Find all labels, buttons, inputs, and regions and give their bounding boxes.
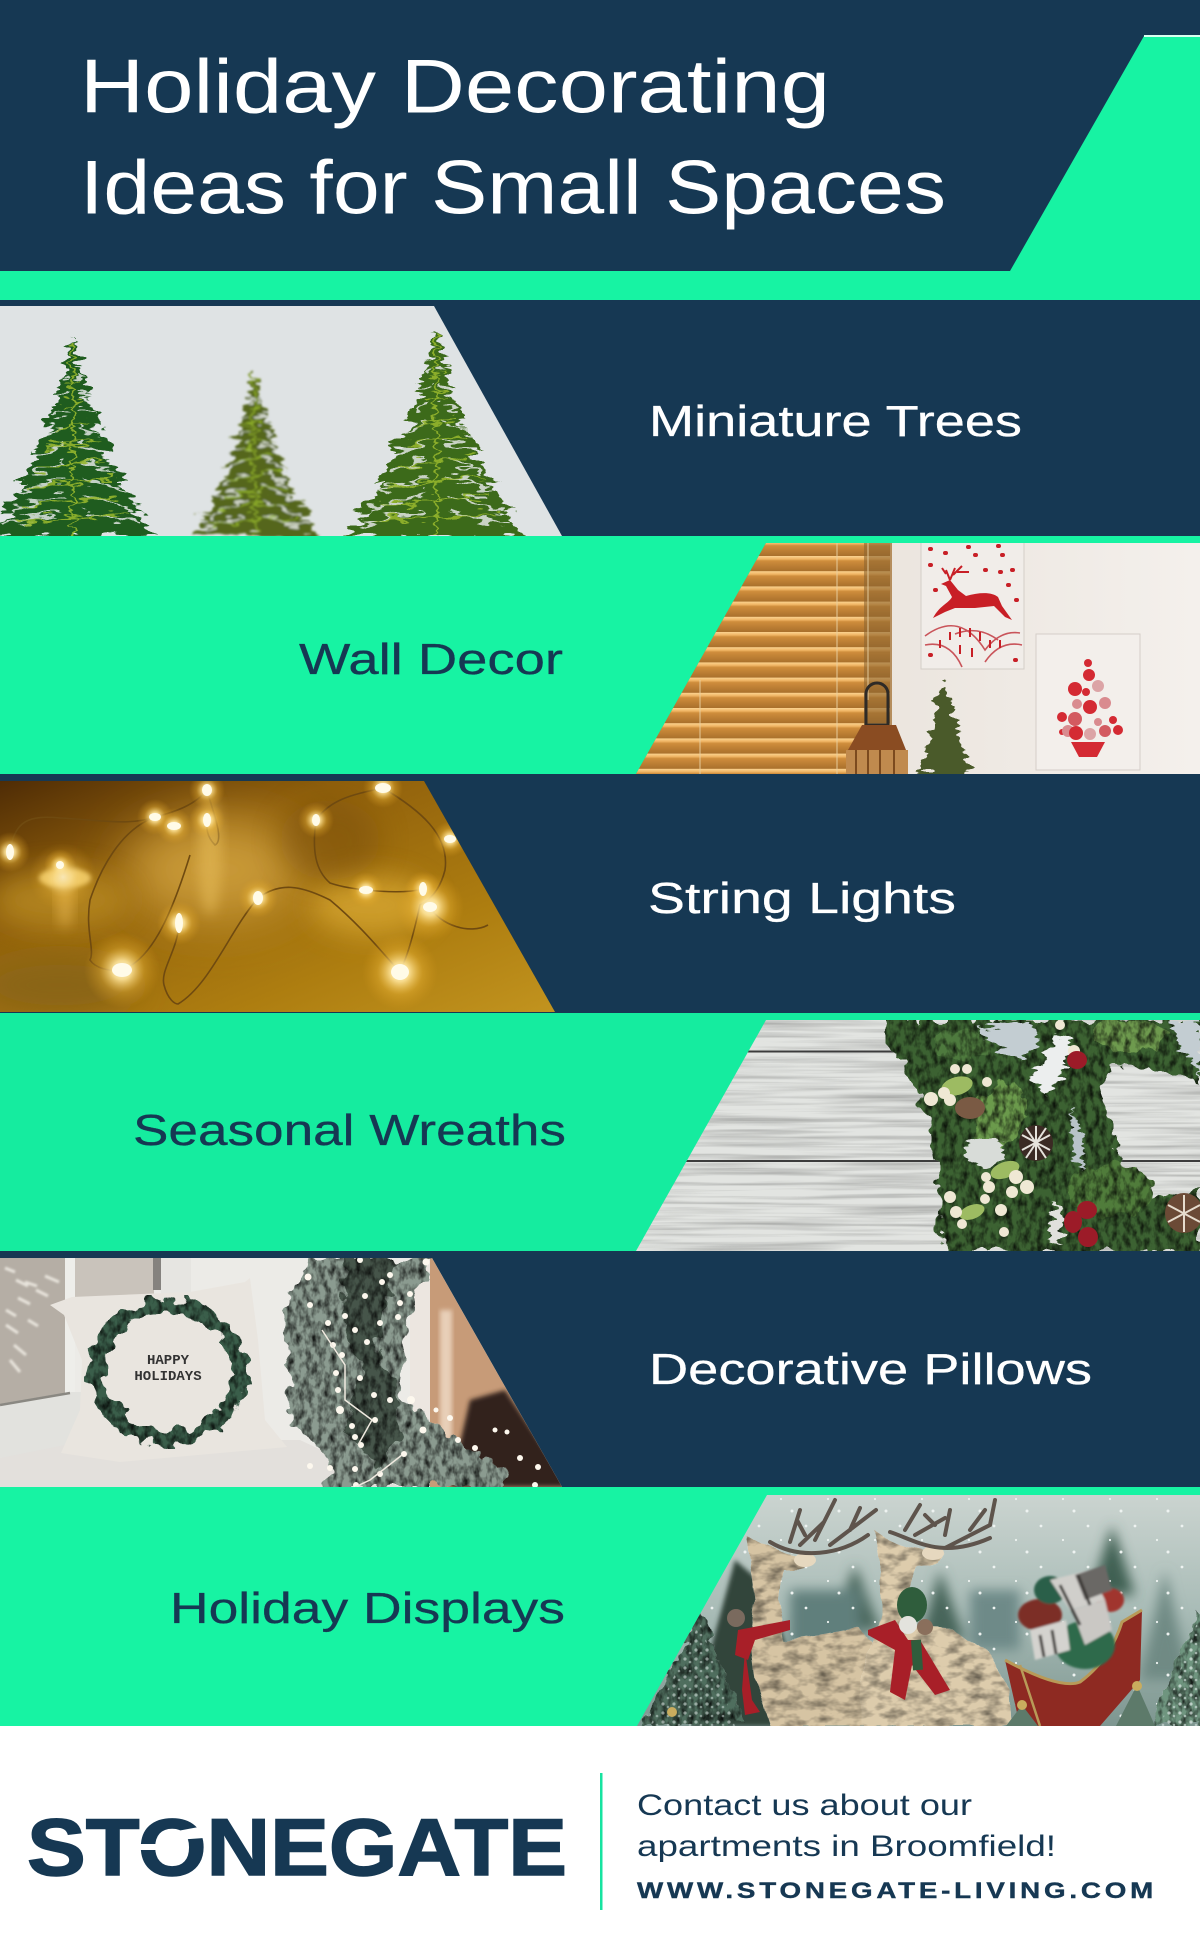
label: wall decor: Wall Decor [299, 635, 563, 684]
deer right [860, 1530, 1012, 1726]
pillow text: HAPPY [147, 1353, 190, 1369]
contact text: Contact us about our [637, 1789, 972, 1822]
photo: decorative pillows [0, 1257, 575, 1488]
divider [600, 1773, 602, 1910]
photo: string lights [0, 768, 560, 1015]
label: miniature trees: Miniature Trees [649, 397, 1022, 446]
small bottle trees [667, 1681, 1155, 1726]
gifts [1018, 1565, 1124, 1669]
sprigs [727, 1587, 933, 1670]
red berries [1064, 1051, 1098, 1247]
website URL: WWW.STONEGATE-LIVING.COM [637, 1878, 1157, 1903]
pillow wreath [96, 1306, 240, 1438]
title: Ideas for Small Spaces [80, 146, 946, 230]
photo: miniature trees [0, 306, 570, 538]
left dark tree [690, 1560, 790, 1726]
fairy lights [304, 1257, 541, 1488]
panel: string lights [0, 768, 1200, 1015]
wreath foliage [886, 1020, 1200, 1251]
label: string lights: String Lights [648, 874, 956, 923]
label: decorative pillows: Decorative Pillows [649, 1345, 1092, 1394]
panel: wall decor [0, 536, 1200, 776]
photo: wall decor [630, 540, 1200, 776]
pillow [50, 1294, 154, 1342]
snow [965, 1022, 1200, 1245]
photo: holiday displays [630, 1495, 1200, 1727]
green angled accent [0, 36, 1200, 300]
lantern [846, 683, 908, 776]
window [0, 1258, 161, 1458]
sleigh [972, 1610, 1142, 1726]
front right frosted tree [1150, 1610, 1200, 1726]
card: ornament tree [1036, 634, 1140, 770]
antlers [770, 1500, 995, 1553]
ribbons [735, 1620, 950, 1715]
small fir tree [918, 683, 970, 774]
falling snow [630, 1495, 1200, 1727]
panel: decorative pillows [0, 1251, 1200, 1488]
sill [0, 1440, 400, 1487]
front left frosted tree [640, 1612, 745, 1726]
deer left [746, 1535, 880, 1726]
panel: seasonal wreaths [0, 1013, 1200, 1252]
panel: miniature trees [0, 300, 1200, 538]
panel: header [0, 0, 1200, 300]
title: Holiday Decorating [80, 44, 830, 130]
contact text: apartments in Broomfield! [637, 1830, 1056, 1863]
logo: Stonegate: STONEGATE [27, 1803, 567, 1893]
panel: footer [0, 1726, 1200, 1950]
blurred forest [790, 1525, 1190, 1680]
deer ears [794, 1546, 944, 1567]
panel: holiday displays [0, 1487, 1200, 1727]
label: seasonal wreaths: Seasonal Wreaths [133, 1106, 566, 1155]
label: holiday displays: Holiday Displays [170, 1584, 565, 1633]
card: reindeer [921, 540, 1024, 669]
leaves [939, 1073, 1022, 1223]
white berries [924, 1020, 1080, 1237]
garland fir [282, 1258, 505, 1487]
photo: seasonal wreaths [630, 1020, 1200, 1252]
pillow text: HOLIDAYS [134, 1369, 202, 1385]
peach background [430, 1258, 562, 1487]
pine cones [955, 1097, 1200, 1233]
